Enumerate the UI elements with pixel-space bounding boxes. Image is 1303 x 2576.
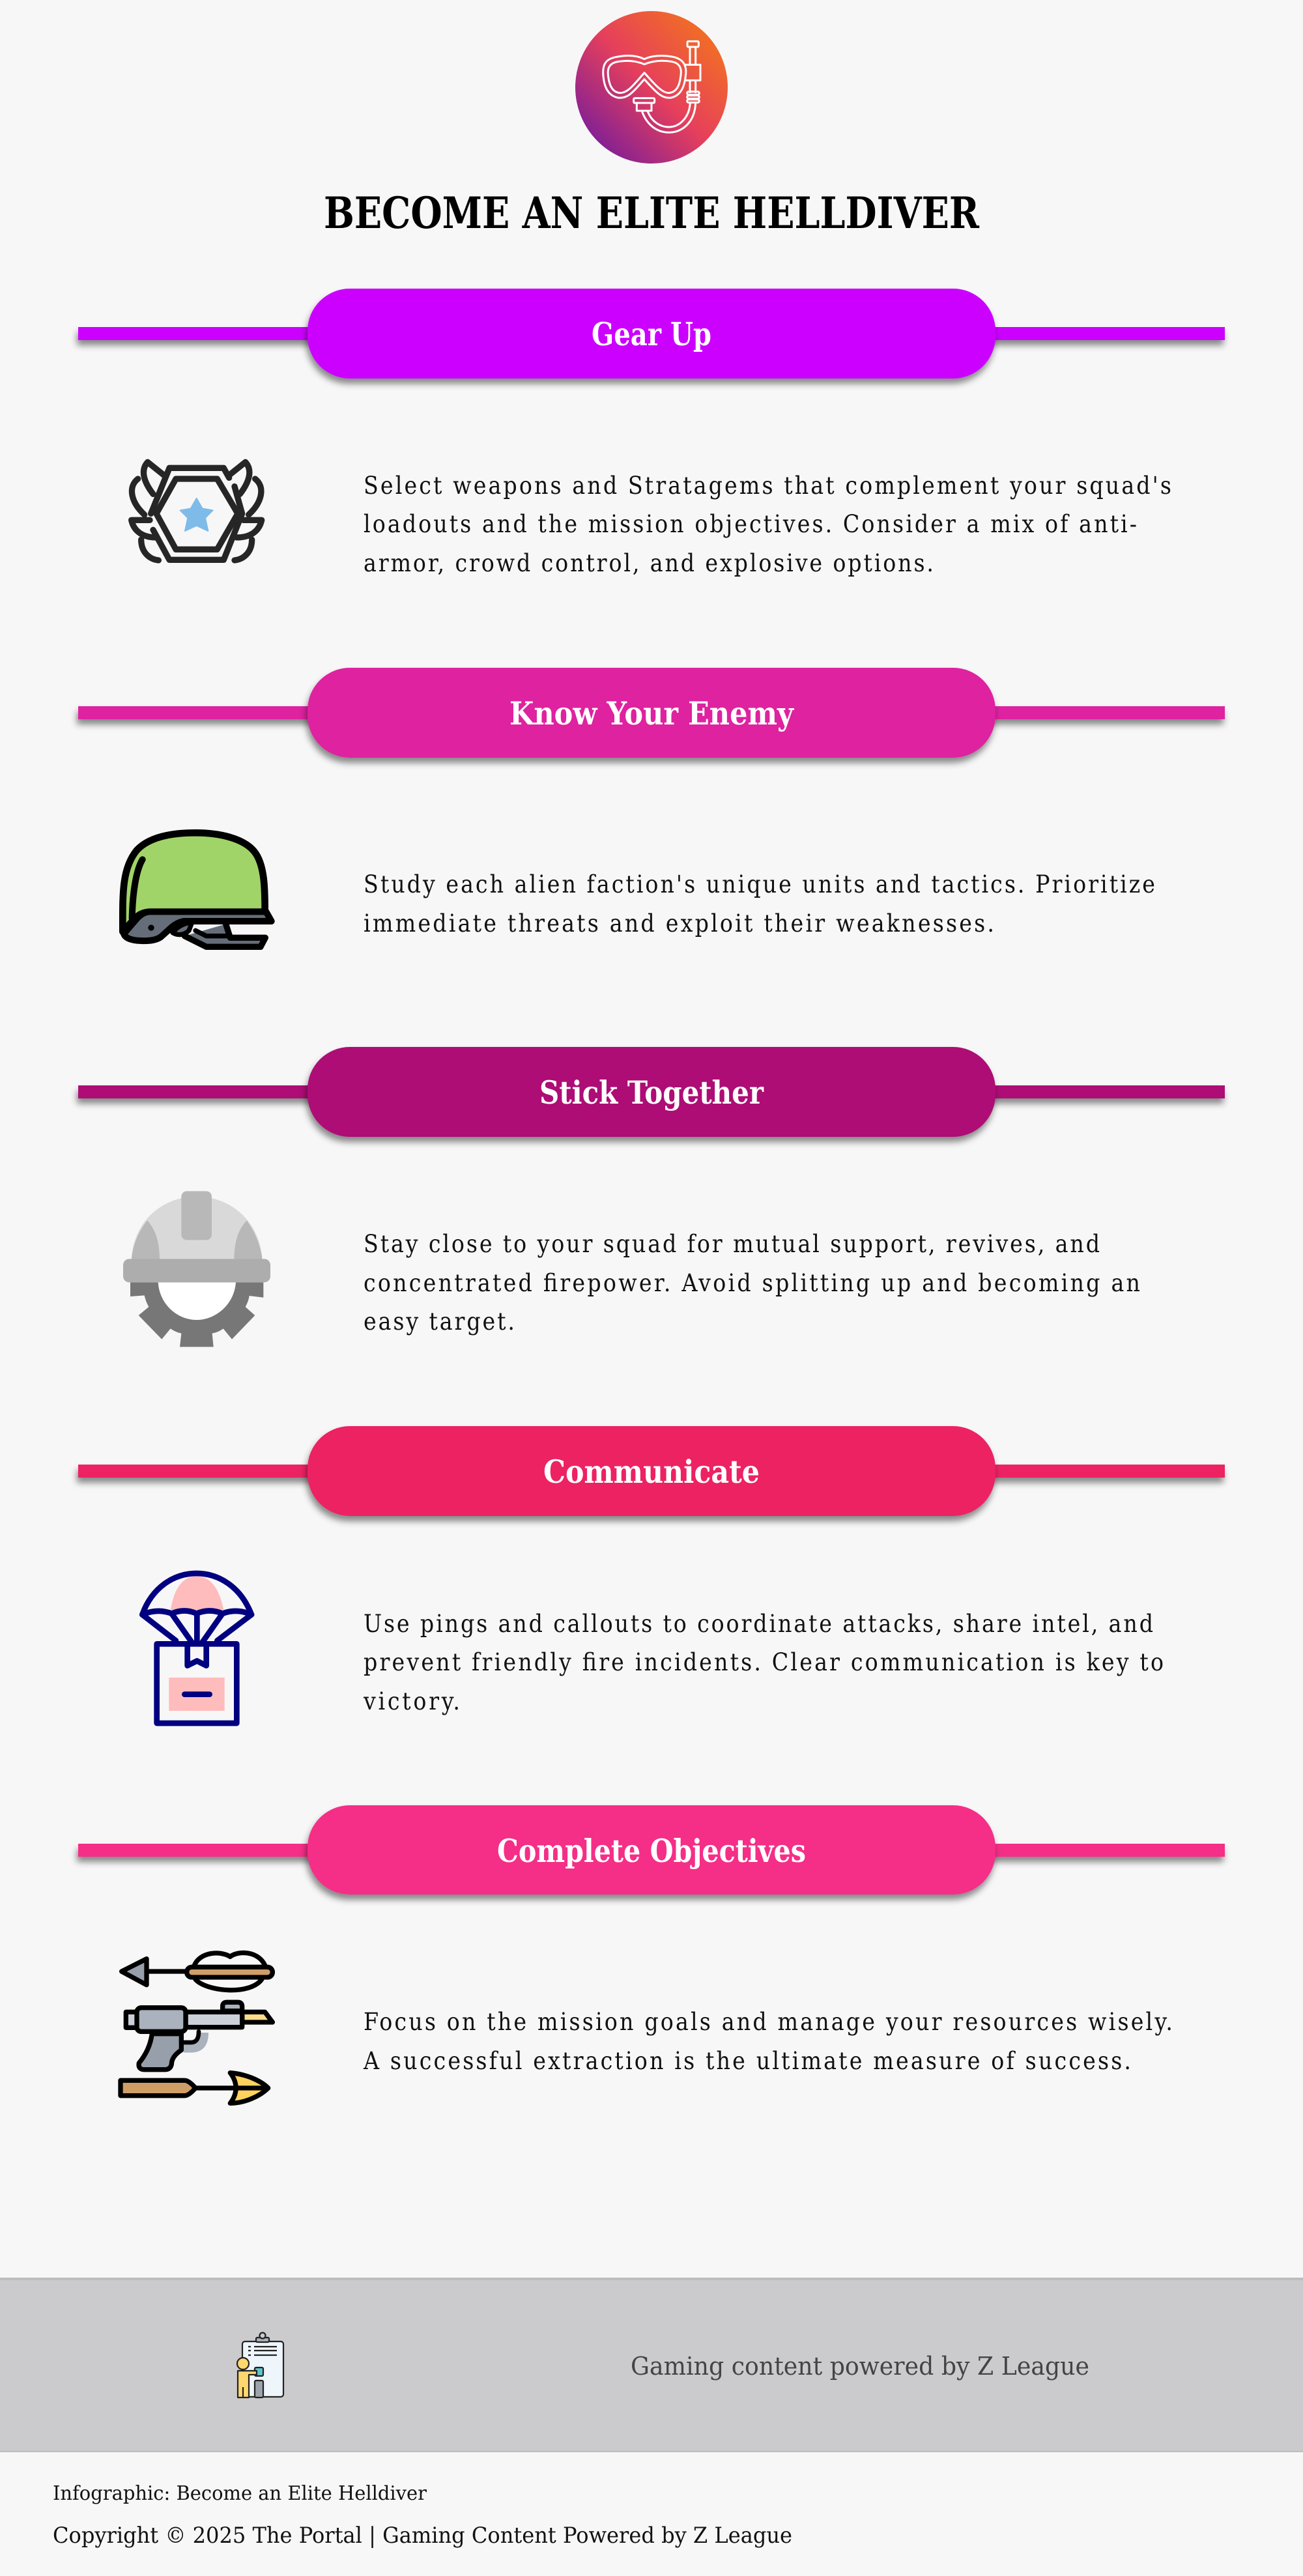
- title: BECOME AN ELITE HELLDIVER: [324, 188, 980, 238]
- icon: medal with star and laurels: [132, 462, 262, 560]
- section: Know Your Enemy: [78, 668, 1225, 947]
- section: Communicate: [78, 1426, 1225, 1723]
- text: Complete Objectives description: [363, 2008, 1173, 2075]
- text: Stick Together description: concentrated firepower. Avoid splitting up and becoming an: [364, 1269, 1140, 1297]
- text: Know Your Enemy description: Study each alien faction's unique units and tactics. Prioritize: [364, 870, 1155, 898]
- heading bar: Stick Together: Stick Together: [539, 1074, 764, 1111]
- section: Gear Up: [78, 289, 1225, 577]
- heading bar: Stick Together: [78, 1047, 1225, 1137]
- footer band: [0, 2278, 1303, 2452]
- heading bar: Complete Objectives: Complete Objectives: [497, 1832, 806, 1870]
- heading bar: Complete Objectives: [78, 1805, 1225, 1895]
- section: Complete Objectives: [78, 1805, 1225, 2103]
- icon: hard hat with gear: [123, 1191, 270, 1347]
- heading bar: Know Your Enemy: Know Your Enemy: [509, 694, 794, 732]
- text: Gear Up description: Select weapons and Stratagems that complement your squad's: [364, 472, 1171, 500]
- icon: clipboard with person: [237, 2332, 283, 2397]
- text: Communicate description: [363, 1610, 1164, 1715]
- text: Communicate description: victory.: [363, 1687, 460, 1715]
- copyright line: Copyright © 2025 The Portal | Gaming Content Powered by Z League: [53, 2523, 792, 2549]
- footer tagline: Gaming content powered by Z League: [631, 2352, 1089, 2381]
- text: Gear Up description: loadouts and the mission objectives. Consider a mix of anti-: [364, 510, 1137, 538]
- heading bar: Know Your Enemy: [78, 668, 1225, 758]
- icon: parachute supply crate: [142, 1573, 251, 1723]
- icon: snorkel mask logo: [575, 11, 728, 164]
- icon: green helmet: [122, 833, 272, 947]
- text: Complete Objectives description: A successful extraction is the ultimate measure of success.: [363, 2047, 1131, 2075]
- heading bar: Communicate: [78, 1426, 1225, 1516]
- text: Know Your Enemy description: immediate threats and exploit their weaknesses.: [364, 909, 994, 937]
- text: Gear Up description: armor, crowd control, and explosive options.: [364, 549, 934, 577]
- text: Communicate description: prevent friendly fire incidents. Clear communication is key to: [364, 1648, 1164, 1676]
- text: Stick Together description: [364, 1230, 1140, 1336]
- credit line: infographic name: Infographic: Become an Elite Helldiver: [53, 2482, 427, 2505]
- text: Stick Together description: easy target.: [364, 1308, 515, 1336]
- text: Stick Together description: Stay close to your squad for mutual support, revives, and: [364, 1230, 1100, 1258]
- text: Gear Up description: [364, 472, 1171, 577]
- heading bar: Gear Up: [78, 289, 1225, 379]
- text: Communicate description: Use pings and callouts to coordinate attacks, share intel, and: [364, 1610, 1153, 1638]
- heading bar: Communicate: Communicate: [543, 1453, 760, 1491]
- text: Know Your Enemy description: [364, 870, 1155, 937]
- icon: harpoon gun and arrows: [121, 1953, 272, 2103]
- text: Complete Objectives description: Focus on the mission goals and manage your resources wisely.: [364, 2008, 1173, 2036]
- heading bar: Gear Up: Gear Up: [592, 315, 711, 353]
- section: Stick Together: [78, 1047, 1225, 1347]
